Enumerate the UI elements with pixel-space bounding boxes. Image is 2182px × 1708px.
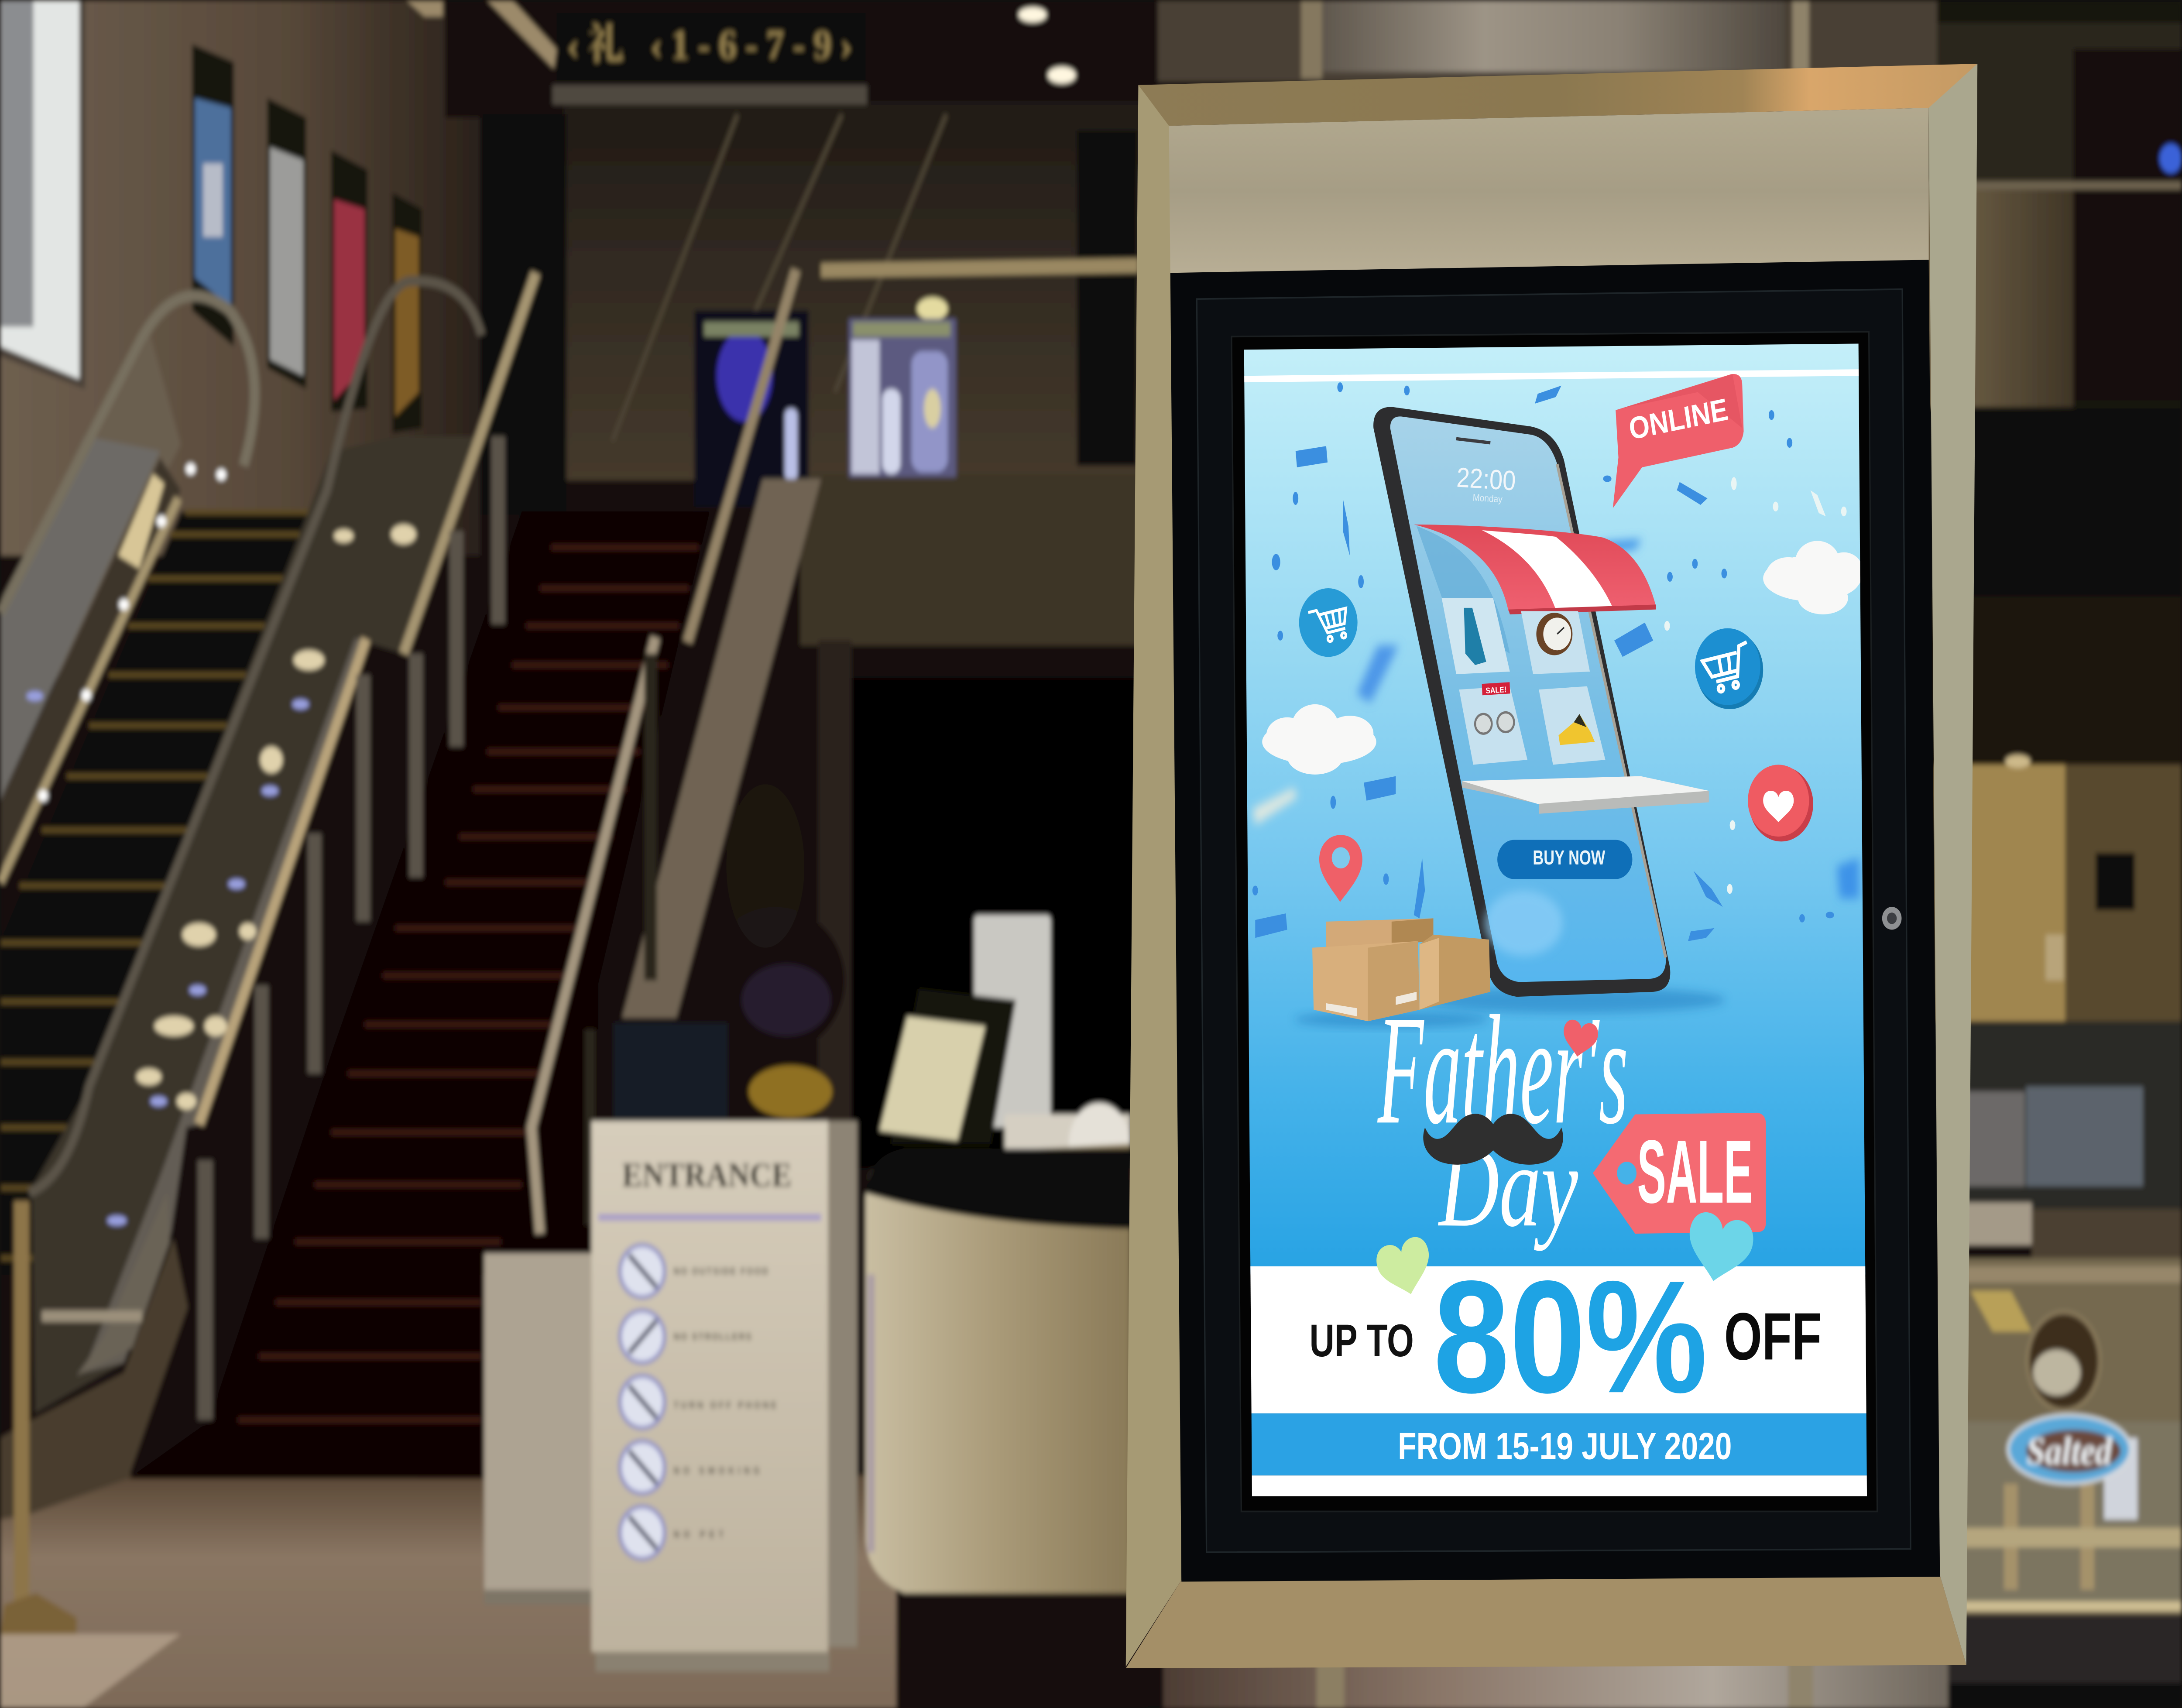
red heart [1560, 1018, 1599, 1060]
right menu boards [1948, 1087, 2143, 1186]
left cart badge [1299, 588, 1358, 657]
bakery display case [1948, 1258, 2182, 1618]
door light [2005, 755, 2030, 768]
dark sign board [614, 1023, 728, 1121]
awning shadow [1417, 526, 1510, 654]
back wall [563, 101, 1162, 480]
left escalator balustrade [0, 296, 255, 884]
right door [1948, 765, 2065, 1021]
prohibition icons [620, 1245, 665, 1559]
phone [1373, 407, 1670, 997]
balcony pillar [818, 641, 852, 1180]
bakery oval logo [2008, 1415, 2131, 1484]
cardboard boxes [1312, 918, 1490, 1021]
sign frame [1126, 64, 1977, 1668]
boxes shadow [1294, 1012, 1489, 1028]
left cloud [1262, 704, 1376, 775]
poster footer [1245, 1475, 1872, 1499]
confetti [1252, 382, 1834, 941]
date text: FROM 15-19 JULY 2020 [1398, 1425, 1732, 1467]
right tan wall section [1927, 189, 2073, 407]
frame left bevel [1126, 85, 1181, 1667]
kiosk rules text: NO STROLLERS [673, 1331, 751, 1342]
right cart badge [1695, 628, 1763, 709]
white confetti [1664, 477, 1847, 894]
pillar above sign [1158, 0, 1937, 82]
phone clock: 22:00 [1456, 461, 1516, 497]
right upper wall [1927, 23, 2182, 186]
case inner step [1197, 289, 1911, 1552]
dark doorway [852, 678, 1137, 1168]
kiosk rules text: NO PET [673, 1529, 724, 1540]
kiosk rules text [673, 1266, 776, 1540]
right ledge [1927, 182, 2182, 189]
heading: Father's: Father's [1376, 984, 1628, 1157]
right shelf zone [1927, 1021, 2182, 1209]
poster [1239, 335, 1873, 1499]
sale tag [1593, 1113, 1766, 1234]
phone speaker [1456, 439, 1490, 443]
top direction sign: ‹礼 ‹1-6-7-9› [567, 21, 852, 68]
right balcony lower band [1927, 597, 2182, 765]
phone glow [1485, 891, 1563, 956]
black poster case [1170, 260, 1940, 1582]
back wall dark column [1077, 131, 1137, 466]
case lock [1882, 907, 1901, 930]
heart badge [1748, 765, 1813, 841]
off label: OFF [1724, 1300, 1822, 1374]
glasses tile [1459, 682, 1527, 765]
escalator steps [0, 511, 362, 1275]
poster top line [1244, 369, 1859, 382]
white offer band [1245, 1266, 1872, 1413]
green heart [1373, 1234, 1437, 1302]
shoe tile [1539, 686, 1606, 765]
right wall plaque [2096, 853, 2135, 910]
ceiling [445, 0, 1169, 118]
left wall [0, 0, 480, 556]
blue dots [27, 691, 309, 1225]
wall posters [192, 44, 422, 433]
blue light [2160, 144, 2182, 173]
tie tile [1442, 598, 1510, 674]
counter tabletop items [879, 915, 1130, 1185]
case recess [1232, 332, 1877, 1512]
bakery crest [2028, 1312, 2100, 1410]
buy now button: BUY NOW [1533, 847, 1605, 869]
back wall diagonals [612, 114, 946, 441]
right cloud [1763, 541, 1863, 614]
right warm wall [1927, 765, 2182, 1021]
right floor edge [1927, 1683, 2182, 1708]
80 percent: 80% [1433, 1248, 1708, 1427]
kiosk rules text: TURN OFF PHONE [673, 1400, 776, 1411]
balcony front [800, 474, 1148, 645]
dark corridor [480, 114, 566, 514]
buy now button [1497, 840, 1632, 879]
shelf [1462, 776, 1709, 814]
glasses tile: SALE! [1486, 685, 1506, 695]
prohibition icon slashes [629, 1255, 657, 1549]
blurred confetti [1252, 539, 1859, 899]
online speech bubble: ONLINE [1626, 392, 1730, 447]
right background upper [1927, 0, 2182, 408]
cyan heart [1682, 1209, 1757, 1289]
location pin [1319, 835, 1362, 902]
frame bottom bevel [1126, 1575, 1966, 1668]
up to label: UP TO [1310, 1315, 1414, 1366]
poster background [1239, 335, 1873, 1275]
right balcony dark band [1927, 408, 2182, 597]
middle glass balustrade [27, 273, 536, 1413]
mustache [1423, 1114, 1563, 1165]
glass reflections [136, 525, 416, 1109]
heading: Day: Day [1438, 1121, 1578, 1252]
right counter shelf [2032, 1209, 2182, 1258]
curved counter [865, 1144, 1147, 1708]
top direction sign [552, 13, 867, 105]
lower glass glow [76, 1193, 170, 1376]
phone day: Monday [1472, 492, 1503, 505]
plant [706, 784, 845, 1118]
upper hall posters [694, 310, 956, 507]
bakery oval logo: Salted [2027, 1430, 2113, 1473]
frame top face [1169, 108, 1929, 274]
brass stanchion [0, 1201, 76, 1636]
right floor [1927, 1614, 2182, 1708]
frame top bevel [1138, 64, 1977, 126]
escalator base [0, 1238, 188, 1519]
pillar below sign [1163, 1659, 1948, 1708]
frame right bevel [1929, 64, 1977, 1665]
phone shadow [1420, 987, 1726, 1013]
ceiling light strips [406, 0, 557, 69]
entrance label: ENTRANCE [622, 1156, 792, 1194]
right dark recess [2073, 49, 2182, 400]
entrance kiosk [591, 1121, 857, 1672]
floor [0, 1475, 919, 1708]
door handle glare [2046, 935, 2064, 981]
white side box [484, 1253, 593, 1605]
upper rail [821, 258, 1138, 278]
kiosk rules text: NO OUTSIDE FOOD [673, 1266, 768, 1277]
right staircase balustrade [532, 270, 821, 1234]
watch tile [1521, 611, 1590, 674]
central staircase [128, 511, 710, 1479]
glass posts [198, 436, 505, 1420]
awning [1414, 525, 1656, 614]
date band [1245, 1413, 1872, 1475]
floor reflection [0, 1634, 181, 1708]
online speech bubble [1613, 374, 1744, 508]
large lit poster [0, 0, 85, 389]
sale tag: SALE [1637, 1122, 1753, 1222]
kiosk rules text: NO SMOKING [673, 1465, 760, 1476]
ceiling lights [917, 7, 1076, 320]
right tray strip [1948, 1203, 2032, 1245]
